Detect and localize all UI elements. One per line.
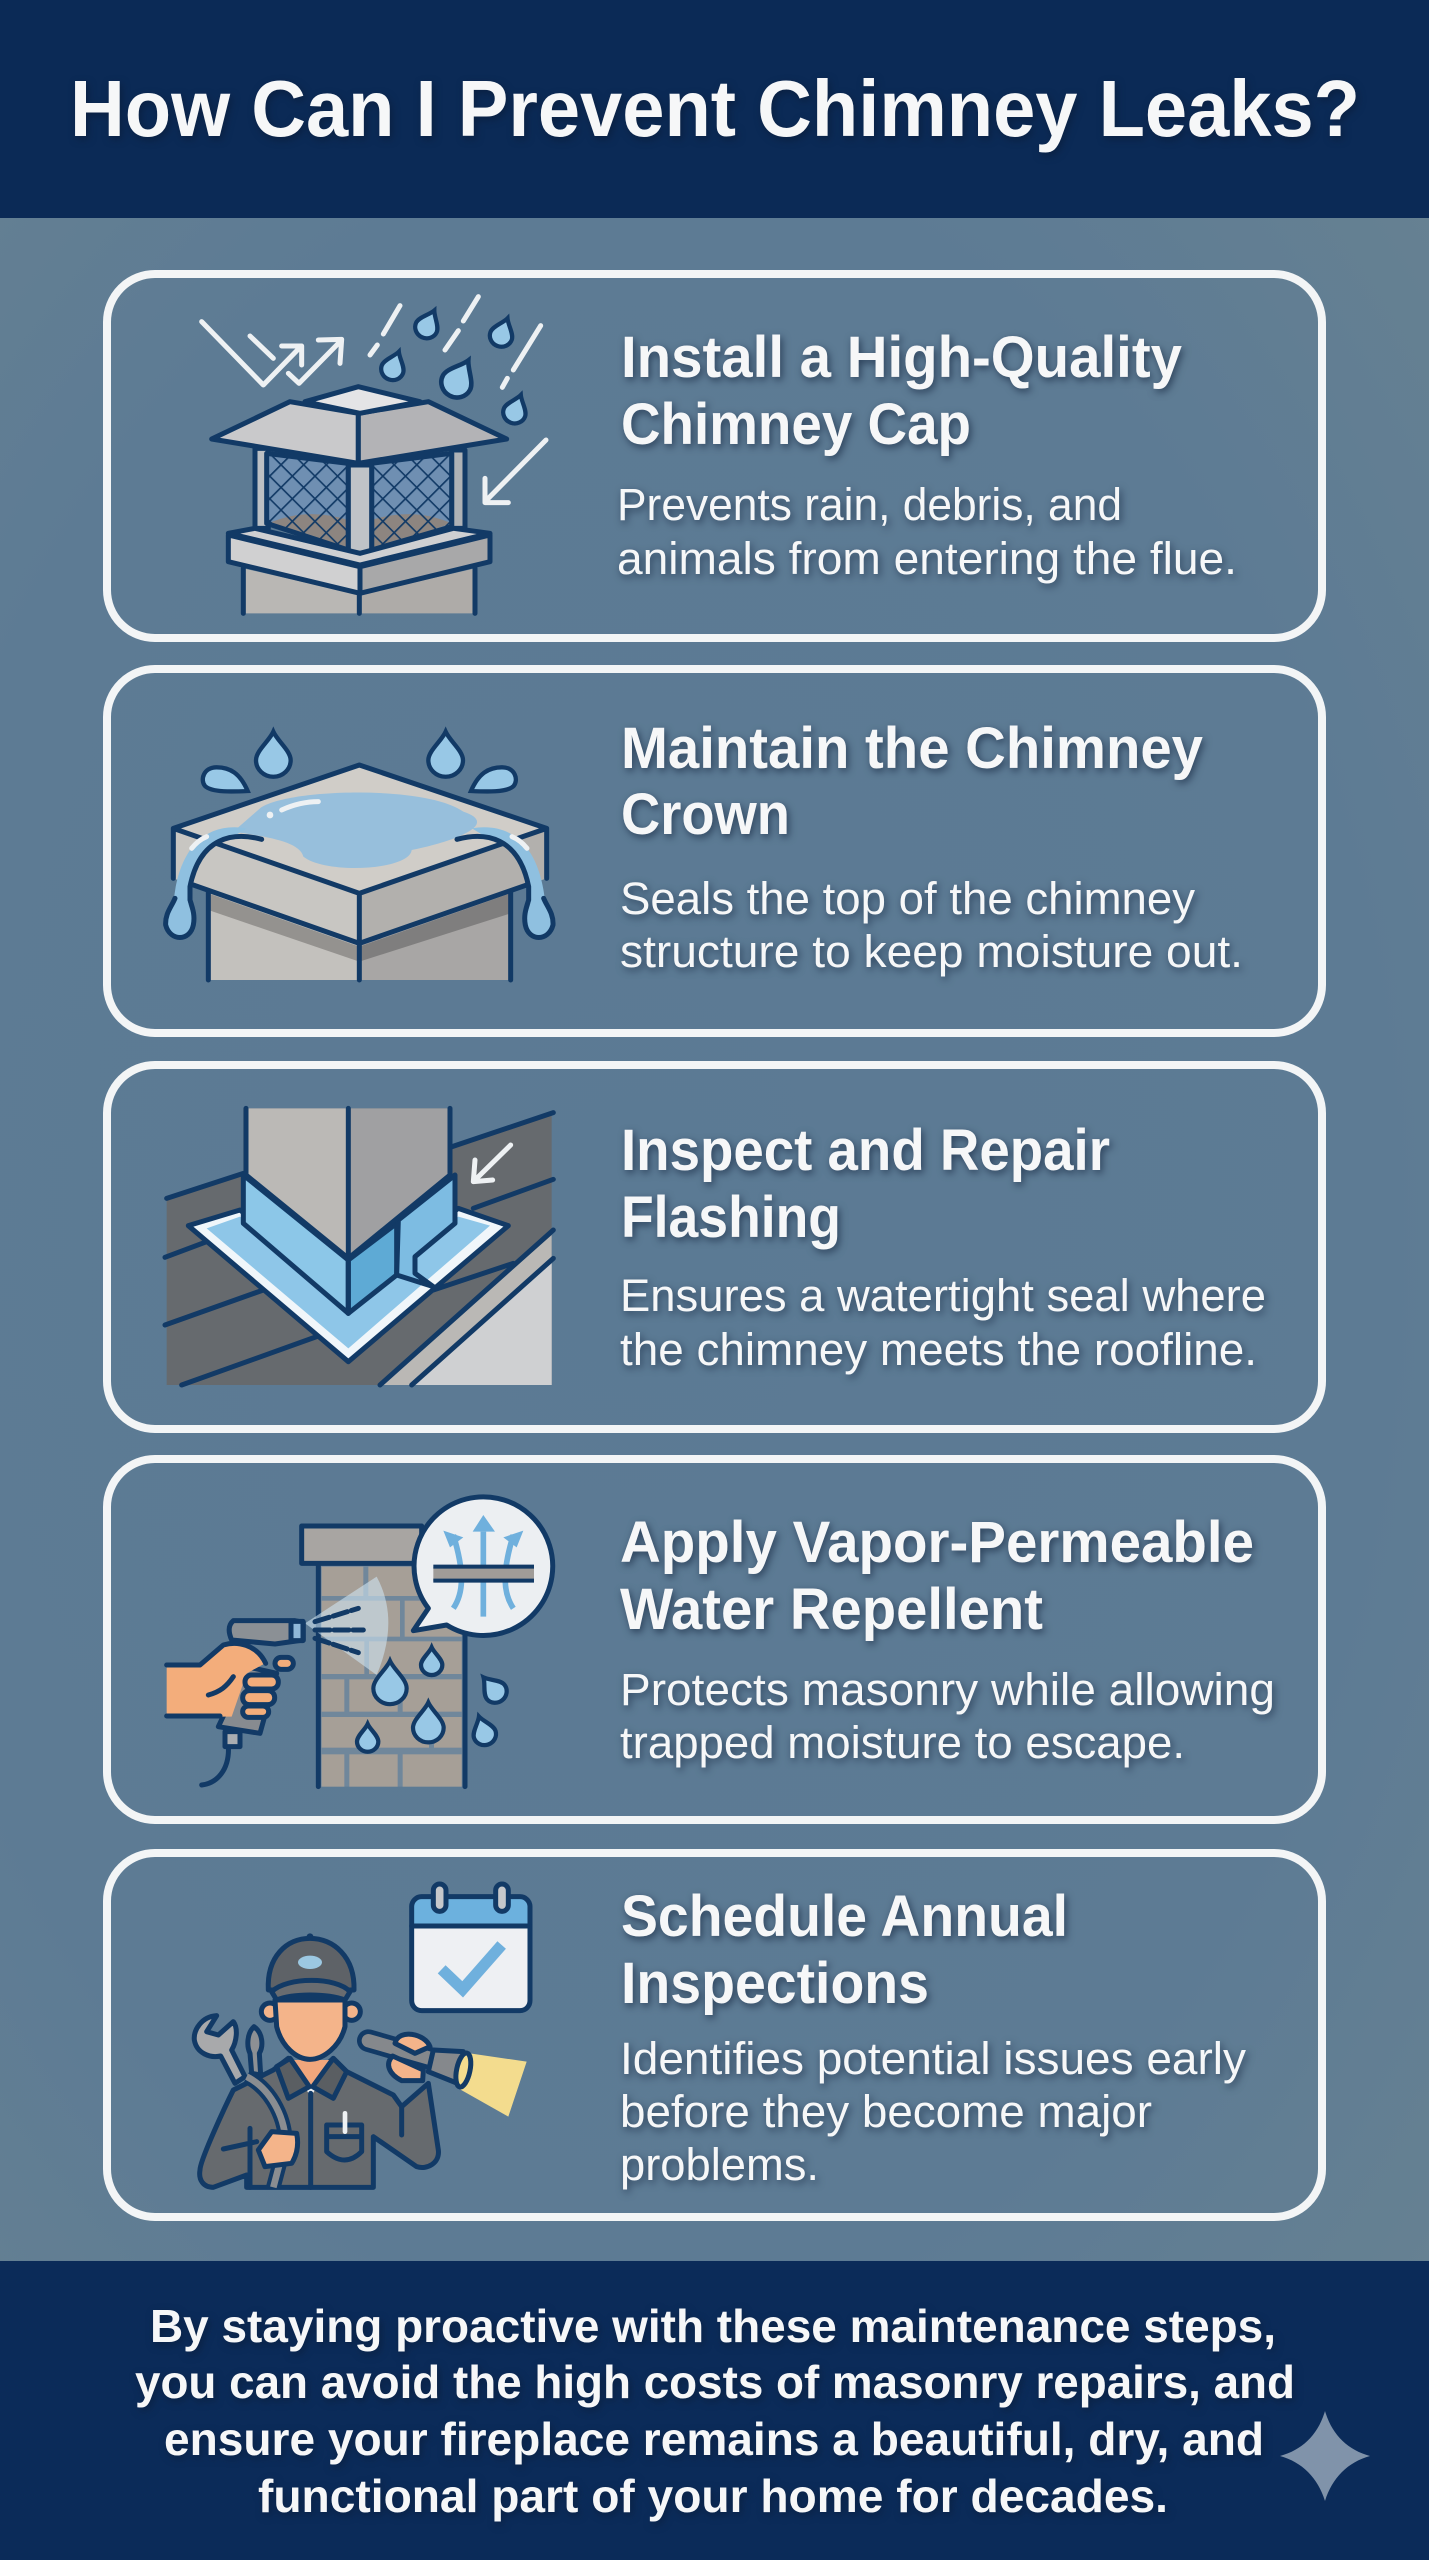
spray bbox=[305, 1577, 388, 1675]
heading: Install a High-Quality bbox=[621, 325, 1182, 390]
icon: chimney cap with rain bbox=[202, 297, 546, 613]
heading: Chimney Cap bbox=[621, 392, 971, 457]
head and cap bbox=[261, 1933, 360, 2059]
speech bubble bbox=[413, 1497, 553, 1636]
description: structure to keep moisture out. bbox=[620, 926, 1243, 977]
description: animals from entering the flue. bbox=[617, 533, 1237, 584]
drops bbox=[373, 1661, 407, 1704]
icon: sparkle bbox=[1280, 2411, 1370, 2501]
heading: Maintain the Chimney bbox=[621, 716, 1203, 781]
description: Ensures a watertight seal where bbox=[620, 1270, 1266, 1321]
panel: water repellent bbox=[107, 1459, 1322, 1820]
chimney flange and body bbox=[228, 528, 490, 613]
heading bbox=[621, 716, 1203, 847]
heading bbox=[621, 1884, 1068, 2016]
header band bbox=[0, 0, 1429, 218]
base flashing bbox=[188, 1208, 508, 1362]
wrench and screwdriver bbox=[194, 2016, 262, 2083]
description: Prevents rain, debris, and bbox=[617, 479, 1122, 530]
flashlight bbox=[368, 2034, 473, 2088]
heading: Apply Vapor-Permeable bbox=[620, 1510, 1254, 1575]
roof of cap bbox=[212, 387, 507, 463]
background bbox=[0, 218, 1429, 2261]
icon: inspector with calendar bbox=[194, 1884, 530, 2187]
heading: Flashing bbox=[621, 1185, 841, 1250]
heading bbox=[621, 1118, 1110, 1250]
closing statement: functional part of your home for decades. bbox=[258, 2470, 1168, 2522]
description: before they become major bbox=[620, 2086, 1152, 2137]
heading: Inspections bbox=[621, 1951, 929, 2016]
panel: chimney cap bbox=[107, 274, 1322, 638]
description bbox=[620, 873, 1243, 977]
description: the chimney meets the roofline. bbox=[620, 1324, 1257, 1375]
footer band bbox=[0, 2261, 1429, 2560]
description: trapped moisture to escape. bbox=[620, 1717, 1185, 1768]
description: Seals the top of the chimney bbox=[620, 873, 1196, 924]
panel: annual inspections bbox=[107, 1853, 1322, 2217]
pooled water bbox=[233, 792, 477, 868]
icon: roof flashing bbox=[165, 1108, 553, 1385]
heading: Water Repellent bbox=[620, 1577, 1043, 1642]
description: Protects masonry while allowing bbox=[620, 1664, 1275, 1715]
heading: Crown bbox=[621, 782, 790, 847]
description bbox=[617, 479, 1237, 584]
description bbox=[620, 2033, 1247, 2190]
icon: sprayer on brick chimney bbox=[167, 1497, 553, 1787]
heading bbox=[620, 1510, 1254, 1642]
panel: flashing bbox=[107, 1065, 1322, 1429]
drip right bbox=[457, 827, 554, 938]
closing statement: ensure your fireplace remains a beautiful, dry, and bbox=[164, 2413, 1264, 2465]
drip left bbox=[165, 827, 262, 938]
heading: Inspect and Repair bbox=[621, 1118, 1110, 1183]
description: problems. bbox=[620, 2139, 819, 2190]
description: Identifies potential issues early bbox=[620, 2033, 1247, 2084]
cap legs and mesh bbox=[255, 448, 465, 553]
description bbox=[620, 1664, 1275, 1768]
step flashing bbox=[243, 1175, 348, 1313]
icon: chimney crown with pooled water bbox=[165, 732, 554, 980]
chimney bbox=[247, 1108, 348, 1257]
heading bbox=[621, 325, 1182, 457]
brick chimney bbox=[302, 1526, 465, 1787]
closing statement: you can avoid the high costs of masonry repairs, and bbox=[135, 2356, 1295, 2408]
description bbox=[620, 1270, 1266, 1375]
title: How Can I Prevent Chimney Leaks? bbox=[70, 64, 1360, 153]
body bbox=[200, 2058, 438, 2187]
closing statement bbox=[135, 2300, 1295, 2522]
light beam bbox=[458, 2053, 527, 2117]
spray gun and hand bbox=[167, 1621, 303, 1785]
heading: Schedule Annual bbox=[621, 1884, 1068, 1949]
calendar bbox=[412, 1884, 530, 2011]
panel: chimney crown bbox=[107, 669, 1322, 1033]
closing statement: By staying proactive with these maintenance steps, bbox=[150, 2300, 1276, 2352]
